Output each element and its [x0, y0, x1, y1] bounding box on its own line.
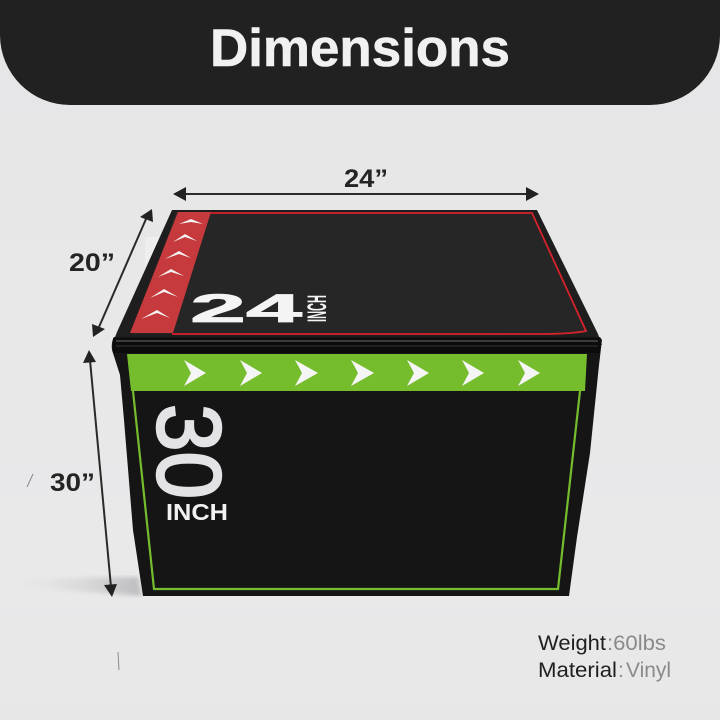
height dimension arrow — [50, 350, 117, 597]
label: 30 INCH: 30 — [138, 404, 238, 499]
label: 24 INCH: INCH — [302, 295, 332, 322]
green band — [127, 354, 587, 391]
green outline — [133, 391, 580, 589]
specs text: Vinyl — [626, 659, 671, 682]
label: 24 INCH: 24 — [190, 287, 304, 331]
red arrow strip — [130, 212, 211, 333]
white chevrons — [184, 360, 540, 386]
title: Dimensions — [210, 19, 510, 78]
faint backdrop fragment — [145, 237, 175, 271]
plyo box — [112, 210, 602, 596]
specs text: Material — [538, 659, 617, 682]
floor shadow — [5, 577, 142, 596]
specs text: :60lbs — [607, 632, 666, 655]
header banner — [0, 0, 720, 105]
width dimension arrow — [173, 165, 539, 201]
box front face — [112, 337, 602, 596]
depth dimension arrow: 20” — [69, 249, 115, 277]
label: 24 INCH — [190, 287, 332, 331]
specs text: : — [618, 659, 624, 682]
box top face — [112, 210, 602, 345]
specs text — [538, 632, 671, 682]
width dimension arrow: 24” — [344, 165, 388, 193]
label: 30 INCH: INCH — [166, 499, 228, 525]
specks — [27, 474, 33, 487]
specs text: Weight — [538, 632, 606, 655]
depth dimension arrow — [69, 209, 153, 337]
height dimension arrow: 30” — [50, 469, 95, 497]
